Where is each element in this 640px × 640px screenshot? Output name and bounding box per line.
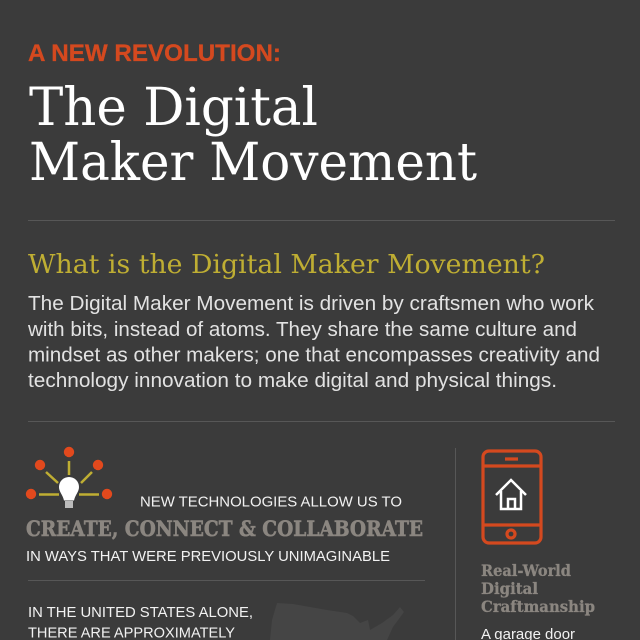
title: Maker Movement [29,133,477,193]
intro paragraph [27,293,600,392]
United States text [28,604,253,640]
intro paragraph: technology innovation to make digital and physical things. [28,370,557,392]
side heading: Real-World [481,561,571,580]
intro paragraph: The Digital Maker Movement is driven by craftsmen who work [28,293,595,315]
intro paragraph: with bits, instead of atoms. They share the same culture and [27,319,577,341]
technologies statement: CREATE, CONNECT & COLLABORATE [26,516,423,541]
side heading: Digital [481,579,538,598]
map: United States silhouette [270,603,404,640]
side heading [481,561,595,616]
intro paragraph: mindset as other makers; one that encompasses creativity and [28,344,600,366]
United States text: IN THE UNITED STATES ALONE, [28,604,253,621]
title: The Digital [29,78,318,138]
technologies statement: IN WAYS THAT WERE PREVIOUSLY UNIMAGINABLE [26,548,390,565]
technologies statement [26,494,423,565]
eyebrow heading: A NEW REVOLUTION: [28,40,281,67]
icon: smartphone with house [483,451,541,543]
section heading: What is the Digital Maker Movement? [28,250,545,280]
technologies statement: NEW TECHNOLOGIES ALLOW US TO [140,494,402,510]
icon: light bulb with connected dots [26,447,112,508]
side heading: Craftmanship [481,597,595,616]
title [29,78,477,193]
